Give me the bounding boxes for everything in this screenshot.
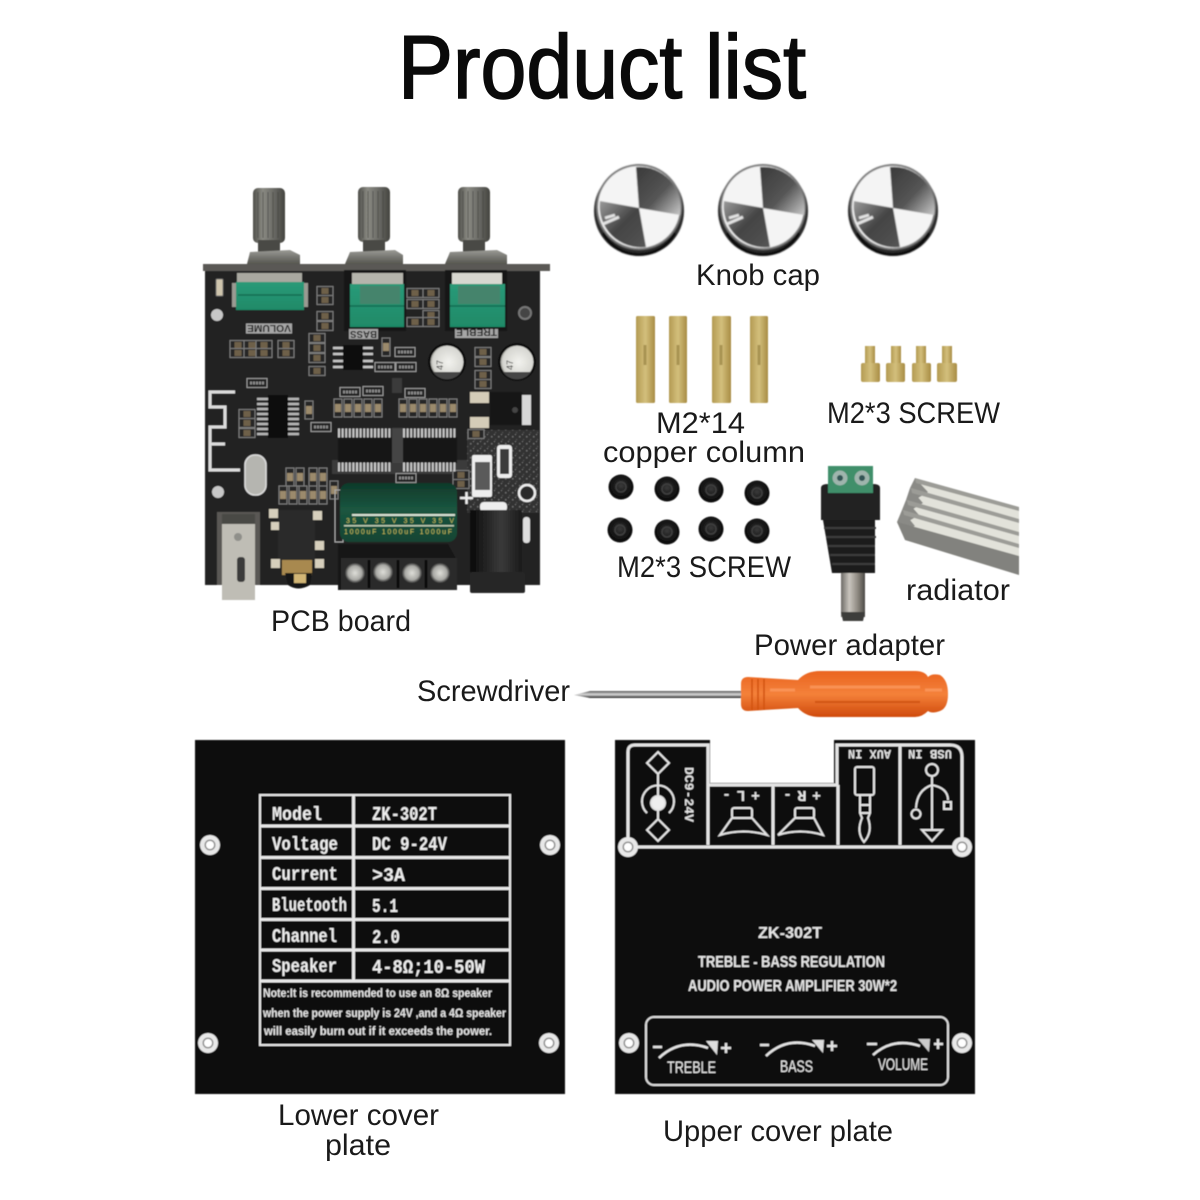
icon: AUX jack: AUX IN	[848, 746, 891, 761]
electrolytic capacitors	[428, 343, 536, 381]
label: knob cap: Knob cap	[696, 259, 820, 292]
mounting holes	[198, 835, 560, 1053]
panel: lower cover plate	[195, 740, 565, 1094]
screw terminal	[338, 544, 457, 590]
panel: upper cover plate	[615, 740, 975, 1094]
control legend frame: BASS	[780, 1057, 813, 1076]
spec table: Bluetooth	[272, 895, 347, 917]
spec table: ZK-302T	[372, 804, 437, 826]
large capacitor: 1000uF 1000uF 1000uF	[344, 529, 452, 536]
DC jack	[470, 502, 530, 593]
icon: knob cap 1	[594, 164, 684, 256]
label: M2*14 copper column: copper column	[603, 436, 805, 469]
spec table: Current	[272, 864, 338, 886]
panel: brass M2*3 screws	[861, 346, 957, 382]
panel: power adapter	[821, 466, 880, 621]
panel: radiator	[897, 478, 1019, 575]
icon: USB symbol: USB IN	[908, 746, 952, 761]
note text: when the power supply is 24V ,and a 4Ω speaker	[262, 1006, 506, 1020]
product name text	[688, 925, 897, 995]
label: black M2*3 screw: M2*3 SCREW	[617, 551, 792, 584]
label: brass M2*3 screw: M2*3 SCREW	[827, 397, 1001, 430]
spec table: DC 9-24V	[372, 834, 447, 856]
label: M2*14 copper column: M2*14	[656, 407, 745, 440]
audio jack	[269, 509, 324, 588]
spec table: Voltage	[272, 834, 338, 856]
icon: right speaker: + R -	[783, 786, 821, 803]
product name text: ZK-302T	[758, 925, 822, 942]
mounting holes	[618, 837, 972, 1053]
bluetooth antenna	[210, 392, 240, 470]
label: power adapter: Power adapter	[754, 629, 945, 662]
control legend frame: VOLUME	[878, 1055, 928, 1074]
USB connector	[217, 512, 260, 600]
icon: knob cap 3	[848, 164, 938, 256]
potentiometer shafts	[247, 187, 507, 264]
spec table: >3A	[372, 865, 406, 887]
title: Product list	[398, 18, 806, 118]
circuit board body	[205, 270, 540, 585]
silkscreen labels: VOLUME	[247, 322, 291, 333]
panel: screwdriver	[574, 671, 948, 717]
small components	[230, 286, 491, 504]
icon: left speaker	[720, 786, 767, 835]
control legend frame: TREBLE	[667, 1058, 716, 1077]
amplifier chips	[338, 433, 457, 467]
silkscreen labels: BASS	[350, 328, 377, 339]
label: radiator: radiator	[906, 574, 1010, 607]
silkscreen labels	[246, 322, 498, 339]
panel: knob caps	[594, 164, 938, 256]
connector outline	[628, 745, 962, 847]
icon: DC power jack: DC9-24V	[681, 767, 696, 822]
product name text: TREBLE - BASS REGULATION	[698, 954, 885, 971]
green potentiometers	[232, 270, 507, 331]
electrolytic capacitors: 47	[435, 360, 445, 370]
panel: PCB board	[203, 187, 550, 600]
label: lower cover plate: plate	[325, 1129, 391, 1162]
crystal	[245, 455, 266, 495]
spec table: Speaker	[272, 956, 337, 978]
note text	[262, 986, 506, 1038]
icon: left speaker: + L -	[722, 786, 760, 803]
large capacitor: 35 V 35 V 35 V 35 V	[346, 518, 454, 525]
spec table	[260, 795, 510, 1045]
label: screwdriver: Screwdriver	[417, 675, 570, 708]
spec table: 4-8Ω;10-50W	[372, 957, 486, 979]
silkscreen labels: TREBLE	[456, 326, 497, 337]
icon: AUX jack	[848, 746, 891, 842]
electrolytic capacitors: 47	[505, 360, 515, 370]
control legend frame	[646, 1017, 948, 1085]
icon: USB symbol	[908, 746, 952, 841]
icon: DC power jack	[642, 752, 696, 841]
label: PCB board: PCB board	[271, 605, 411, 638]
spec table: Model	[272, 804, 322, 826]
spec table: 2.0	[372, 927, 400, 949]
note text: will easily burn out if it exceeds the power.	[263, 1024, 492, 1038]
icon: knob cap 2	[718, 164, 808, 256]
small black ICs	[257, 345, 373, 438]
icon: right speaker	[778, 786, 823, 835]
note text: Note:It is recommended to use an 8Ω speaker	[263, 986, 492, 1000]
panel: copper columns	[636, 316, 768, 403]
label: lower cover plate: Lower cover	[278, 1099, 439, 1132]
product name text: AUDIO POWER AMPLIFIER 30W*2	[688, 978, 897, 995]
voltage regulator	[460, 392, 535, 504]
label: upper cover plate: Upper cover plate	[663, 1115, 893, 1148]
large capacitor	[335, 483, 457, 542]
spec table: 5.1	[372, 896, 398, 918]
panel: black M2*3 screws	[608, 474, 770, 544]
spec table: Channel	[272, 926, 337, 948]
